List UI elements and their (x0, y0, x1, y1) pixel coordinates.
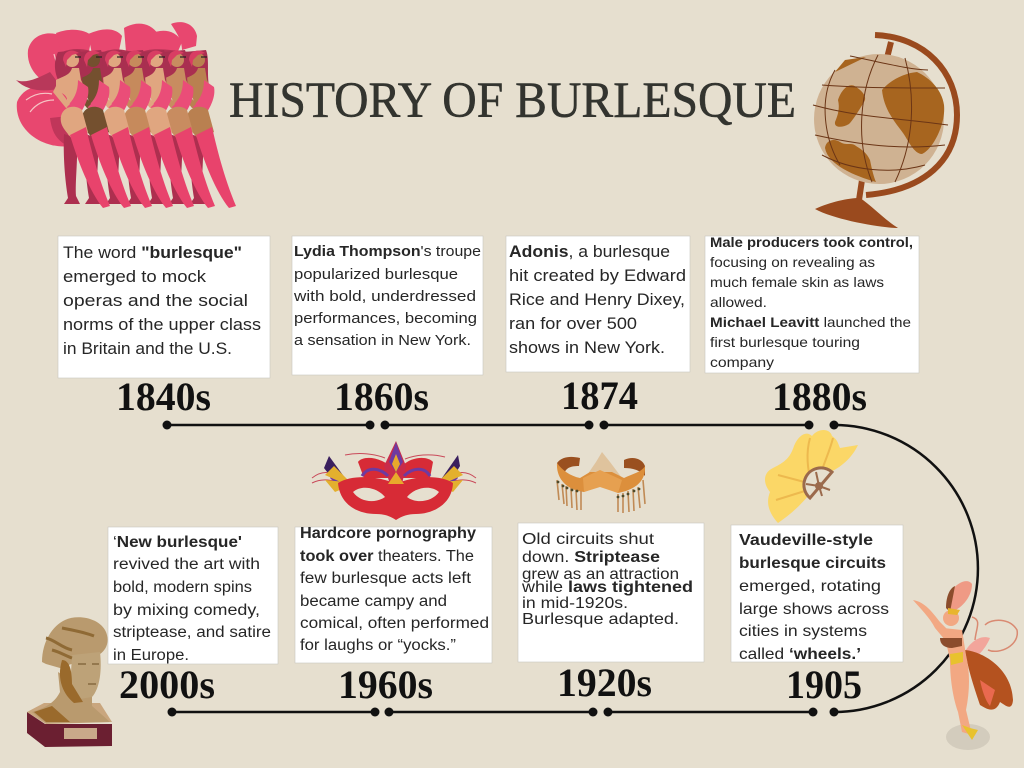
panel: 1920s: while laws tightened (521, 579, 693, 596)
panel: 2000s: in Europe. (113, 647, 189, 664)
panel: 1840s: norms of the upper class (63, 315, 261, 334)
panel: 1874: hit created by Edward (509, 267, 686, 285)
panel: 1960s: few burlesque acts left (300, 570, 472, 587)
panel: 2000s: revived the art with (113, 556, 260, 573)
year: 1860s: 1860s (334, 374, 429, 419)
panel: 1905 (731, 525, 903, 663)
panel: 1960s: for laughs or “yocks.” (300, 637, 456, 654)
panel: 1960s (295, 525, 492, 663)
panel: 1920s: down. Striptease (522, 549, 660, 566)
panel: 1920s: Old circuits shut (522, 531, 655, 548)
panel: 1874: Adonis, a burlesque (509, 243, 670, 261)
timeline: connecting arc (834, 425, 978, 712)
panel: 1880s (705, 234, 919, 373)
panel: 1874 (506, 236, 690, 372)
panel: 1874: shows in New York. (509, 339, 665, 357)
panel: 1860s: popularized burlesque (294, 266, 458, 283)
panel: 1874: ran for over 500 (509, 315, 637, 333)
panel: 1920s: Burlesque adapted. (522, 611, 679, 628)
panel: 1880s: focusing on revealing as (710, 254, 875, 270)
panel: 2000s: ‘New burlesque' (113, 534, 242, 551)
year: 1905: 1905 (786, 662, 862, 707)
panel: 1920s: in mid-1920s. (522, 595, 628, 612)
illustration: feathered dancer (913, 581, 1017, 750)
dancer plumes (16, 22, 197, 146)
panel: 2000s: striptease, and satire (113, 624, 271, 641)
panel: 1880s: Male producers took control, (710, 234, 913, 250)
illustration: yellow feather fan (765, 430, 858, 523)
panel: 1960s: took over theaters. The (300, 548, 474, 565)
timeline: upper row (162, 420, 838, 716)
panel: 1860s (292, 236, 483, 375)
panel: 2000s: by mixing comedy, (113, 602, 260, 619)
panel: 1840s: emerged to mock (63, 267, 207, 286)
panel: 2000s (108, 527, 278, 664)
panel: 1960s: became campy and (300, 593, 447, 610)
illustration: carnival mask (312, 441, 476, 520)
panel: 1840s (58, 236, 270, 378)
panel: 1840s: in Britain and the U.S. (63, 339, 232, 358)
panel: 1880s: Michael Leavitt launched the (710, 314, 911, 330)
panel: 1840s: The word "burlesque" (63, 243, 242, 262)
panel: 1905: called ‘wheels.’ (739, 646, 861, 663)
panel: 1880s: much female skin as laws (710, 274, 884, 290)
illustration: antique globe (813, 35, 957, 228)
panel: 1905: cities in systems (739, 623, 867, 640)
panel: 1880s: company (710, 354, 774, 370)
panel: 1960s: Hardcore pornography (300, 525, 476, 542)
year: 1920s: 1920s (557, 660, 652, 705)
year: 1874: 1874 (561, 373, 638, 418)
year: 1880s: 1880s (772, 374, 867, 419)
panel: 1860s: performances, becoming (294, 310, 477, 327)
illustration: jewelled headpiece (557, 452, 645, 513)
year: 1960s: 1960s (338, 662, 433, 707)
panel: 1860s: Lydia Thompson 's troupe (294, 243, 481, 260)
year: 1840s: 1840s (116, 374, 211, 419)
panel: 1905: burlesque circuits (739, 555, 886, 572)
panel: 1840s: operas and the social (63, 291, 248, 310)
panel: 1905: large shows across (739, 601, 889, 618)
illustration: line of showgirl dancers (16, 22, 236, 208)
year: 2000s: 2000s (119, 662, 215, 707)
panel: 1860s: a sensation in New York. (294, 332, 471, 349)
panel: 1874: Rice and Henry Dixey, (509, 291, 685, 309)
illustration: classical bust (27, 617, 112, 747)
panel: 1920s: grew as an attraction (522, 566, 679, 583)
panel: 1860s: with bold, underdressed (293, 288, 476, 305)
timeline: lower row (172, 711, 813, 713)
panel: 1880s: allowed. (710, 294, 767, 310)
panel: 2000s: bold, modern spins (113, 579, 252, 596)
panel: 1905: emerged, rotating (739, 578, 881, 595)
panel: 1880s: first burlesque touring (710, 334, 860, 350)
title: HISTORY OF BURLESQUE (229, 73, 796, 129)
panel: 1960s: comical, often performed (300, 615, 489, 632)
panel: 1905: Vaudeville-style (739, 532, 873, 549)
panel: 1920s (518, 523, 704, 662)
